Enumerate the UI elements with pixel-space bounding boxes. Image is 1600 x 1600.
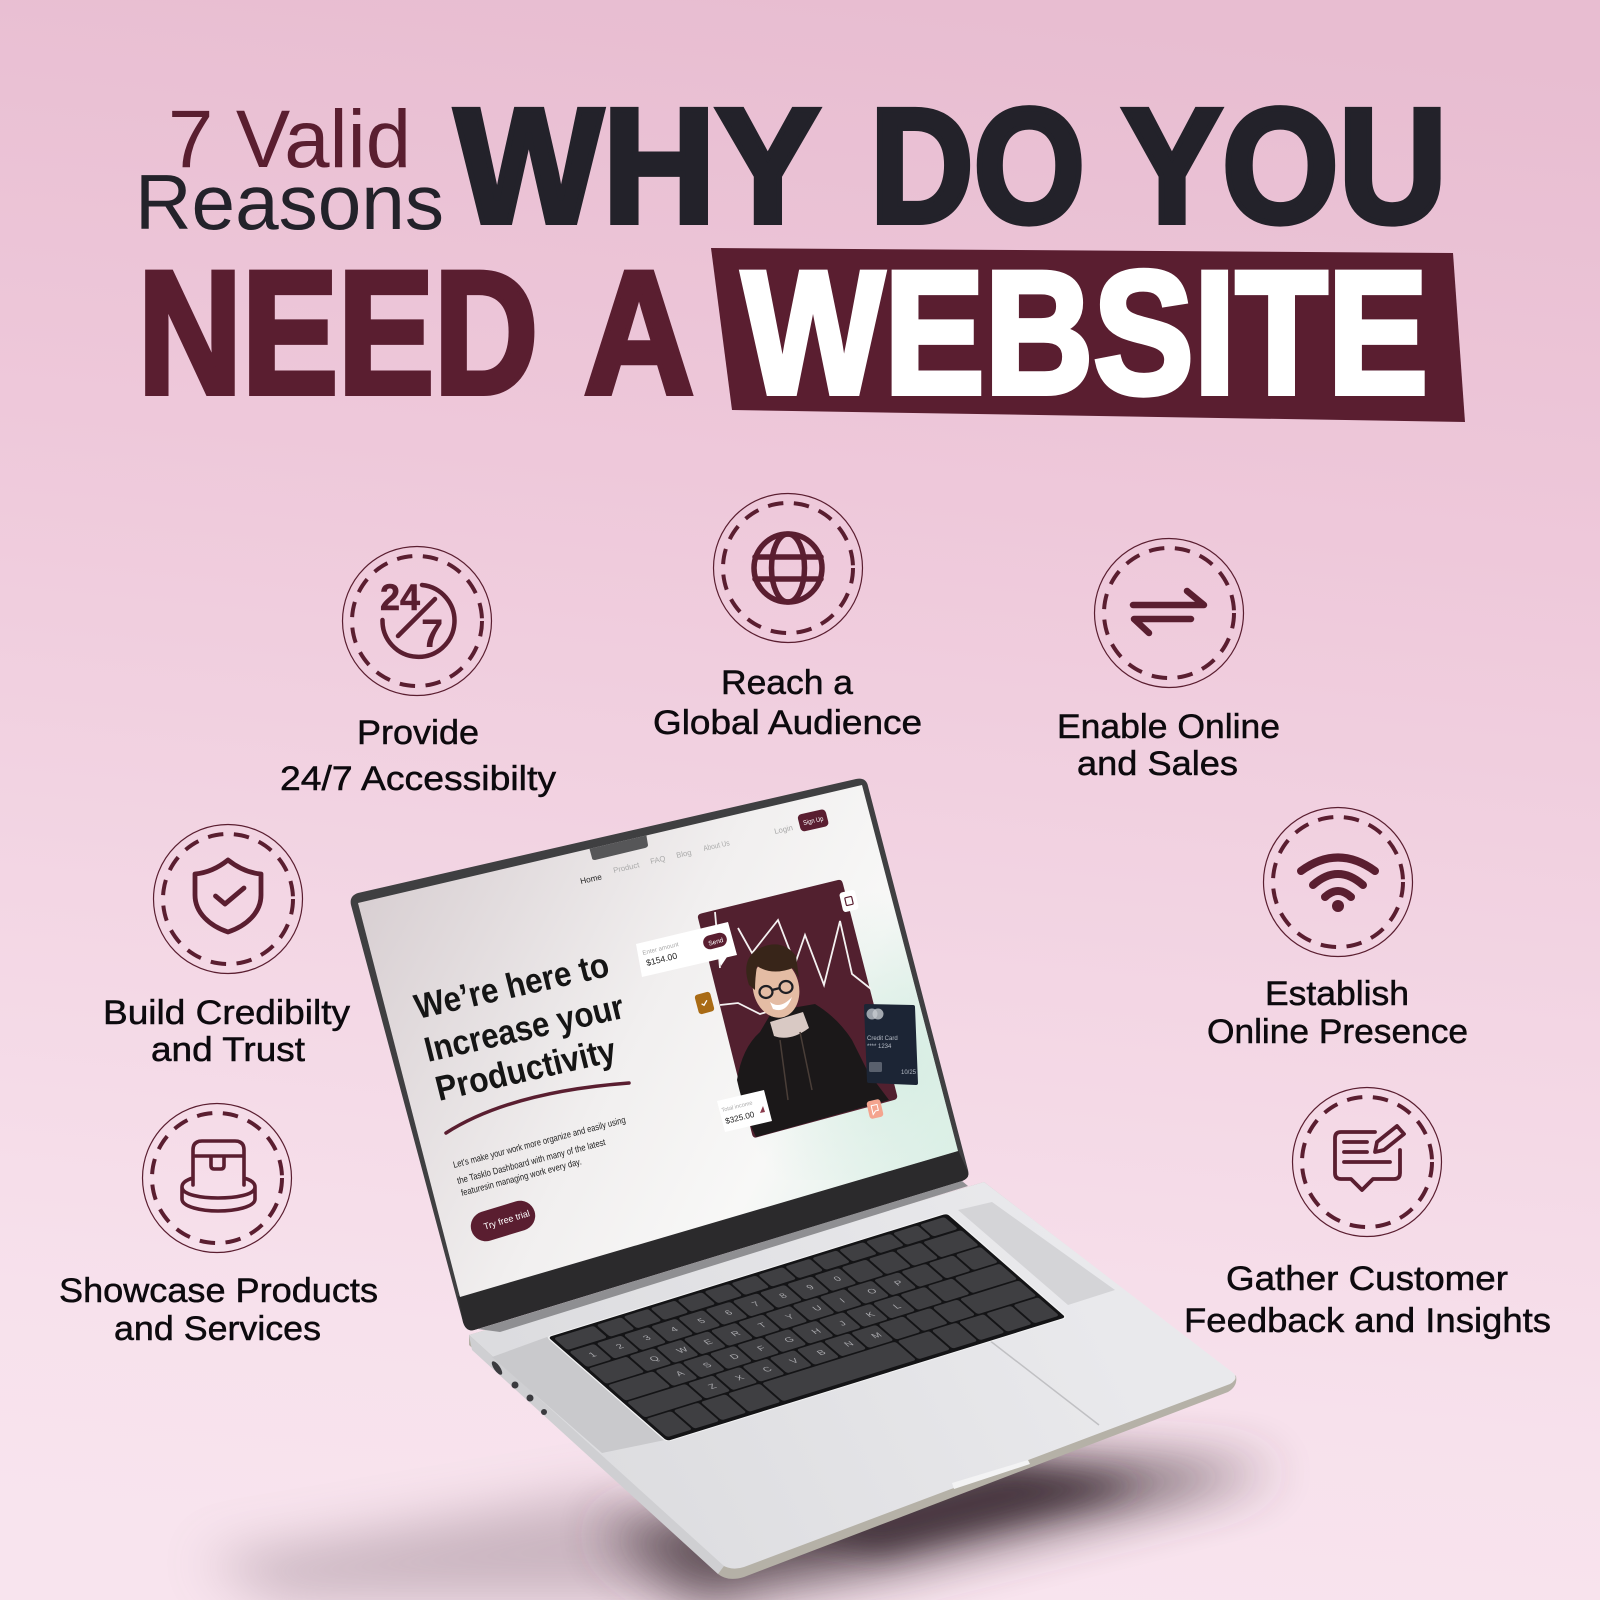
screen headline: Productivity — [431, 1030, 620, 1109]
label: Showcase Products — [59, 1272, 378, 1310]
credit card — [864, 1004, 918, 1085]
item: online presence — [1207, 808, 1468, 1051]
laptop lid — [340, 770, 980, 1332]
sign up button: Sign Up — [803, 816, 824, 827]
keyboard: ASDFGHJKL — [673, 1302, 903, 1378]
navigation: FAQ — [649, 854, 666, 866]
screen underline — [446, 1083, 629, 1133]
icon: 24/7 clock: 24 — [380, 577, 420, 618]
screen headline — [412, 958, 622, 1100]
total income card — [717, 1090, 772, 1132]
send amount card: Enter amount — [642, 941, 680, 957]
credit card: 10/25 — [901, 1070, 917, 1076]
icon: wifi — [1264, 808, 1412, 956]
heading line 2: A — [584, 236, 694, 431]
label: and Services — [114, 1310, 321, 1348]
screen headline: Increase your — [420, 987, 628, 1070]
credit card: Credit Card — [867, 1036, 898, 1042]
white tag icon — [839, 889, 859, 913]
hinge strip — [478, 1181, 968, 1332]
speaker left — [492, 1337, 665, 1453]
screen headline: We’re here to — [410, 945, 613, 1027]
maroon photo card — [698, 880, 897, 1138]
label: and Sales — [1077, 745, 1238, 783]
screen — [358, 785, 958, 1297]
icon: feedback bubble — [1292, 1088, 1442, 1236]
label — [103, 994, 350, 1069]
heading line 1: YOU — [1122, 74, 1447, 257]
icon: product box — [142, 1104, 292, 1252]
laptop base — [469, 1182, 1236, 1579]
person — [737, 944, 889, 1137]
zigzag chart lines — [715, 912, 871, 1014]
title — [135, 74, 1465, 431]
credit card: **** 1234 — [867, 1044, 892, 1050]
send amount card: $154.00 — [645, 951, 678, 968]
heading line 1: WHY — [455, 74, 820, 257]
label — [1207, 975, 1468, 1051]
screen paragraph — [452, 1115, 626, 1198]
heading line 1: DO — [870, 74, 1085, 257]
item: credibility — [103, 824, 350, 1069]
label: Gather Customer — [1226, 1260, 1508, 1298]
screen button: Try free trial — [482, 1208, 531, 1232]
label: Feedback and Insights — [1184, 1302, 1551, 1340]
item: online sales — [1057, 538, 1280, 783]
screen paragraph: Let’s make your work more organize and easily using — [452, 1115, 626, 1170]
label: Online Presence — [1207, 1013, 1468, 1051]
icon: 24/7 clock: 7 — [421, 612, 443, 656]
label — [280, 714, 556, 798]
navigation: About Us — [702, 838, 731, 853]
icon: exchange arrows — [1094, 538, 1244, 688]
label: Build Credibilty — [103, 994, 350, 1032]
heading line 2: NEED — [138, 236, 538, 431]
navigation: Product — [612, 860, 641, 875]
item: customer feedback — [1184, 1088, 1551, 1340]
screen button — [470, 1200, 536, 1242]
label: Enable Online — [1057, 708, 1280, 746]
keyboard: QWERTYUIOP — [647, 1279, 905, 1363]
label — [1184, 1260, 1551, 1340]
label — [59, 1272, 378, 1348]
total income card: $325.00 — [724, 1110, 756, 1126]
label: Reach a — [721, 664, 853, 702]
label: 24/7 Accessibilty — [280, 760, 556, 798]
label: Global Audience — [653, 704, 922, 742]
keyboard: ZXCVBNM — [706, 1331, 884, 1390]
item: 24/7 accessibility — [280, 546, 556, 798]
keyboard: 1234567890 — [586, 1275, 844, 1359]
navigation — [579, 823, 794, 886]
speaker right — [958, 1202, 1115, 1305]
navigation: Login — [773, 823, 794, 836]
total income card: Total income — [721, 1100, 753, 1114]
label — [1057, 708, 1280, 783]
icon: globe — [714, 494, 862, 642]
subtitle: 7 Valid Reasons: Reasons — [135, 158, 444, 246]
screen paragraph: the Tasklo Dashboard with many of the latest — [456, 1137, 607, 1186]
laptop shadow — [200, 1455, 1280, 1600]
label: Establish — [1265, 975, 1409, 1013]
icon: shield — [154, 824, 302, 974]
notch — [590, 836, 648, 860]
side ports — [490, 1360, 547, 1415]
check badge — [694, 991, 715, 1015]
subtitle: 7 Valid Reasons: 7 Valid — [168, 94, 411, 185]
screen paragraph: featuresin managing work every day. — [460, 1156, 582, 1198]
sign up button — [797, 809, 829, 832]
keyboard — [547, 1213, 1067, 1442]
item: products — [59, 1104, 378, 1348]
send amount card — [636, 922, 737, 977]
label — [653, 664, 922, 742]
banner: website: WEBSITE — [742, 236, 1428, 431]
icon: 24/7 clock — [342, 546, 492, 696]
navigation: Home — [579, 872, 603, 886]
navigation: Blog — [675, 848, 692, 860]
salmon badge — [866, 1099, 884, 1119]
front notch — [952, 1460, 1030, 1489]
label: and Trust — [151, 1031, 306, 1069]
item: global audience — [653, 494, 922, 742]
send amount card: Send — [708, 937, 725, 948]
subtitle: 7 Valid Reasons — [135, 94, 444, 246]
label: Provide — [357, 714, 479, 752]
laptop — [340, 770, 1236, 1579]
heading line 1 — [455, 74, 1447, 257]
trackpad outline — [989, 1340, 1099, 1425]
